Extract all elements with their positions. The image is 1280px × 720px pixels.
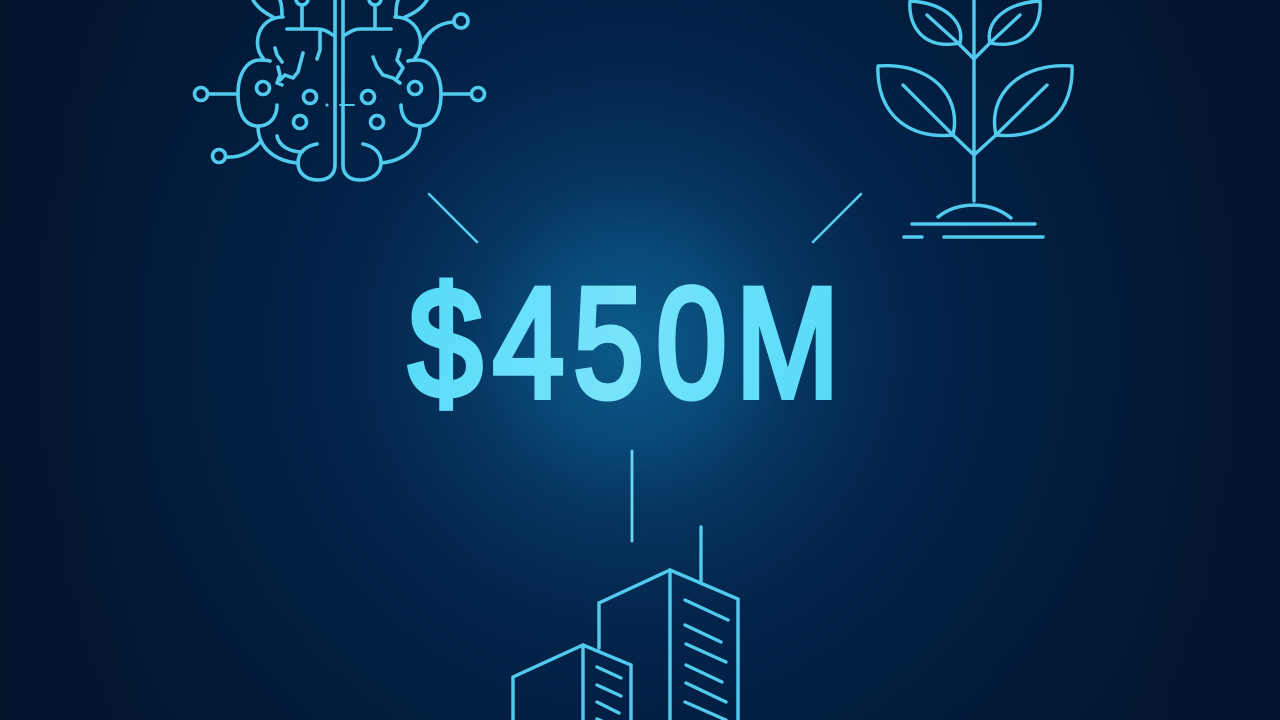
icon: AI brain [194, 0, 484, 180]
plant stem [972, 0, 976, 201]
connector: brain to total [429, 194, 477, 242]
plant lower leaves [878, 66, 1072, 155]
plant soil [904, 205, 1043, 237]
connector: buildings to total [631, 451, 633, 541]
brain right hemisphere [326, 0, 484, 180]
headline figure [409, 256, 839, 430]
icon: growing plant [878, 0, 1072, 237]
headline figure: 0 [656, 256, 726, 430]
tall building [599, 527, 738, 720]
connector: plant to total [813, 194, 861, 242]
icon: city buildings [513, 527, 738, 720]
plant upper leaves [910, 1, 1040, 59]
short building [513, 645, 631, 720]
headline figure: 4 [493, 256, 564, 430]
brain left hemisphere [194, 0, 335, 180]
headline figure: 5 [574, 256, 644, 430]
headline figure: $ [409, 256, 482, 430]
headline figure: M [736, 256, 839, 430]
